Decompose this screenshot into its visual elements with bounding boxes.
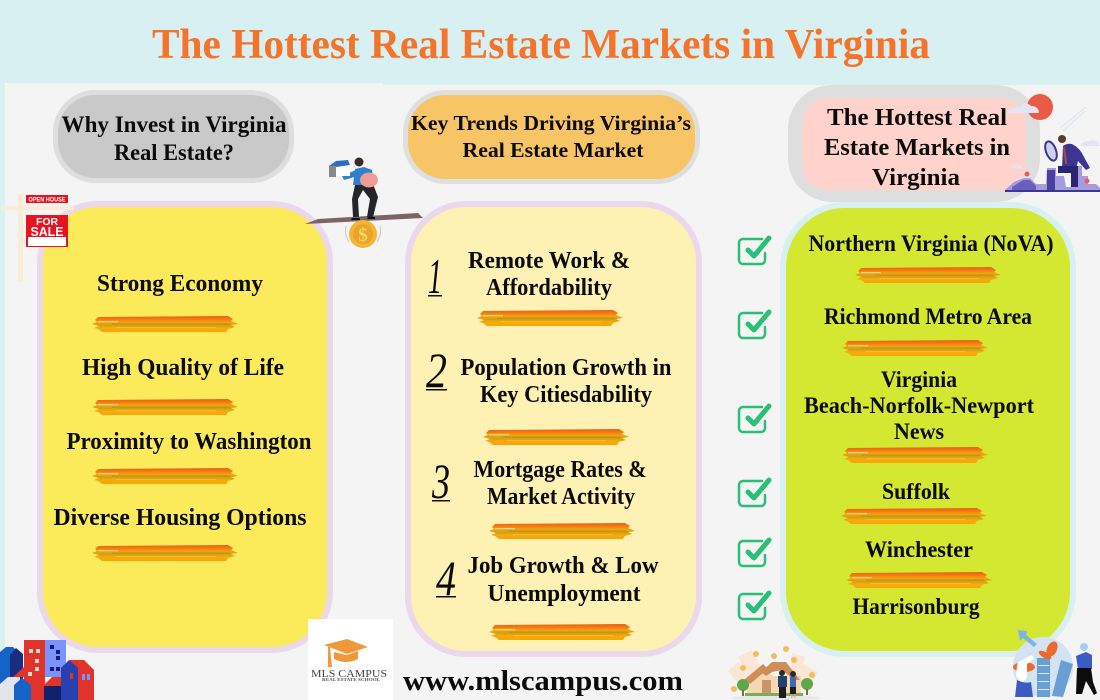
item: harrisonburg: Harrisonburg [852, 594, 980, 619]
item 4: job growth [436, 550, 659, 640]
item 3: mortgage rates: Mortgage Rates & [474, 457, 646, 483]
item: virginia beach [804, 367, 1034, 463]
item: suffolk: Suffolk [882, 479, 950, 504]
item: winchester [846, 537, 992, 588]
item 2: population growth: Key Citiesdability [480, 382, 652, 408]
illustration: man balancing on seesaw: $ [358, 225, 368, 246]
logo: mls campus: MLS CAMPUS [311, 668, 387, 680]
logo: mls campus [308, 619, 393, 700]
illustration: for sale sign [1, 194, 74, 282]
item: virginia beach: News [894, 419, 944, 444]
illustration: for sale sign: SALE [30, 225, 64, 239]
heading: key trends: Key Trends Driving Virginia’s [411, 111, 691, 135]
item 1: remote work [428, 248, 630, 326]
item: northern virginia: Northern Virginia (NoVA) [808, 231, 1054, 256]
item: diverse housing options [54, 505, 306, 561]
heading: key trends [406, 92, 698, 182]
item 4: job growth: Unemployment [488, 581, 641, 607]
item: virginia beach: Virginia [881, 367, 957, 392]
item 1: remote work: Remote Work & [468, 248, 630, 274]
item 1: remote work: Affordability [486, 275, 612, 301]
item: richmond [824, 304, 1032, 356]
heading: why invest: Real Estate? [114, 140, 234, 166]
icon: check 6 [739, 593, 769, 619]
item: northern virginia [808, 231, 1054, 283]
item: diverse housing options: Diverse Housing Options [54, 505, 306, 531]
item: winchester: Winchester [865, 537, 973, 562]
title: The Hottest Real Estate Markets in Virginia [152, 22, 930, 68]
heading: hottest markets: Virginia [872, 165, 960, 191]
heading: why invest: Why Invest in Virginia [62, 112, 287, 138]
item 2: population growth: 2 [426, 342, 447, 398]
item: strong economy [92, 271, 263, 332]
illustration: man balancing on seesaw [305, 158, 423, 248]
illustration: city buildings [0, 640, 94, 700]
item: proximity to washington: Proximity to Washington [66, 429, 312, 455]
logo: mls campus: REAL ESTATE SCHOOL [322, 677, 380, 682]
icon: check 5 [739, 540, 769, 566]
illustration: house with agents [728, 646, 820, 700]
panel: why invest [40, 204, 330, 650]
illustration: for sale sign: FOR [36, 217, 59, 228]
illustration: investigator over city [1005, 94, 1100, 192]
heading: hottest markets: Estate Markets in [824, 135, 1010, 161]
icon: check 1 [739, 238, 769, 264]
heading: why invest [56, 92, 292, 180]
item: high quality of life: High Quality of Life [82, 355, 284, 381]
item: proximity to washington [66, 429, 312, 484]
icon: check 3 [739, 406, 769, 432]
panel: hottest markets list [783, 205, 1073, 654]
item: virginia beach: Beach-Norfolk-Newport [804, 393, 1034, 418]
item: suffolk [841, 479, 987, 524]
heading: key trends: Real Estate Market [462, 138, 644, 162]
illustration: coin stacks and investor [1013, 630, 1097, 697]
item 3: mortgage rates [431, 453, 646, 539]
item 4: job growth: 4 [436, 550, 456, 606]
item 3: mortgage rates: 3 [431, 453, 450, 509]
icon: check 4 [739, 480, 769, 506]
website url: www.mlscampus.com [403, 665, 683, 697]
heading: hottest markets [788, 85, 1040, 202]
icon: check 2 [739, 312, 769, 338]
item 3: mortgage rates: Market Activity [487, 484, 635, 510]
item: high quality of life [82, 355, 284, 415]
item 2: population growth [426, 342, 672, 445]
item 1: remote work: 1 [428, 248, 442, 304]
item 2: population growth: Population Growth in [460, 355, 672, 381]
heading: hottest markets: The Hottest Real [827, 105, 1007, 131]
item 4: job growth: Job Growth & Low [468, 553, 659, 579]
panel: key trends [408, 204, 699, 654]
item: richmond: Richmond Metro Area [824, 304, 1032, 329]
illustration: for sale sign: OPEN HOUSE [28, 196, 66, 204]
item: strong economy: Strong Economy [97, 271, 263, 297]
